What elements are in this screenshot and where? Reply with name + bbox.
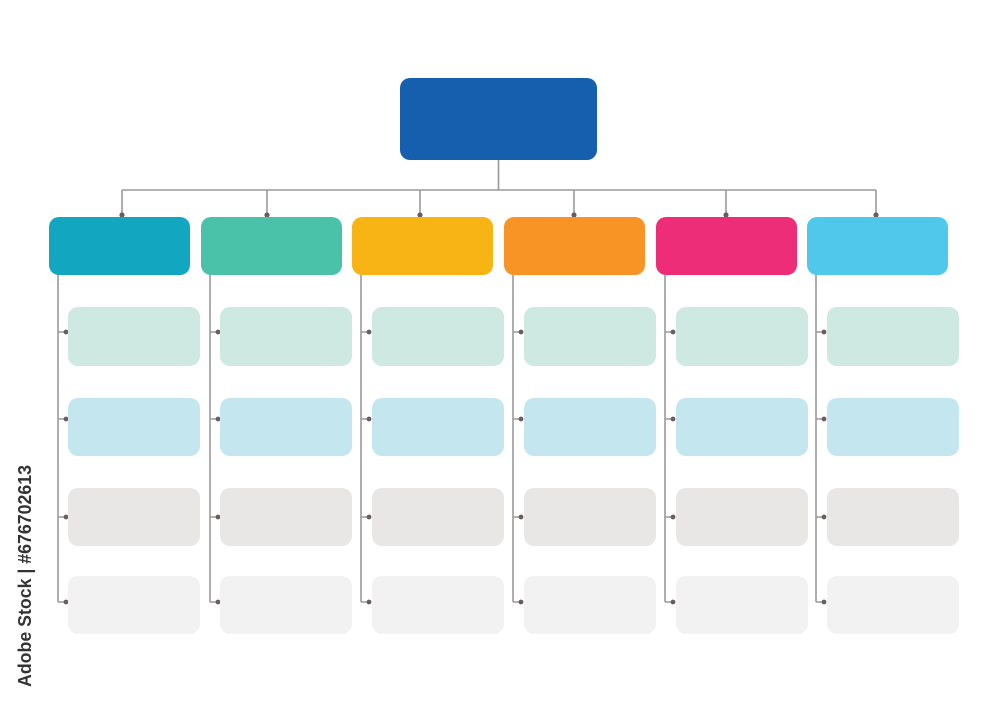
column 1 bbox=[49, 217, 200, 634]
column 5 bbox=[656, 217, 808, 634]
connector dots bbox=[119, 212, 879, 218]
column 3 bbox=[352, 217, 504, 634]
column 2 bbox=[201, 217, 352, 634]
column 6 bbox=[807, 217, 959, 634]
watermark text: Adobe Stock | #676702613 bbox=[15, 465, 35, 687]
root box bbox=[400, 78, 597, 160]
column 4 bbox=[504, 217, 656, 634]
connector: root to level 1 bbox=[122, 160, 876, 215]
